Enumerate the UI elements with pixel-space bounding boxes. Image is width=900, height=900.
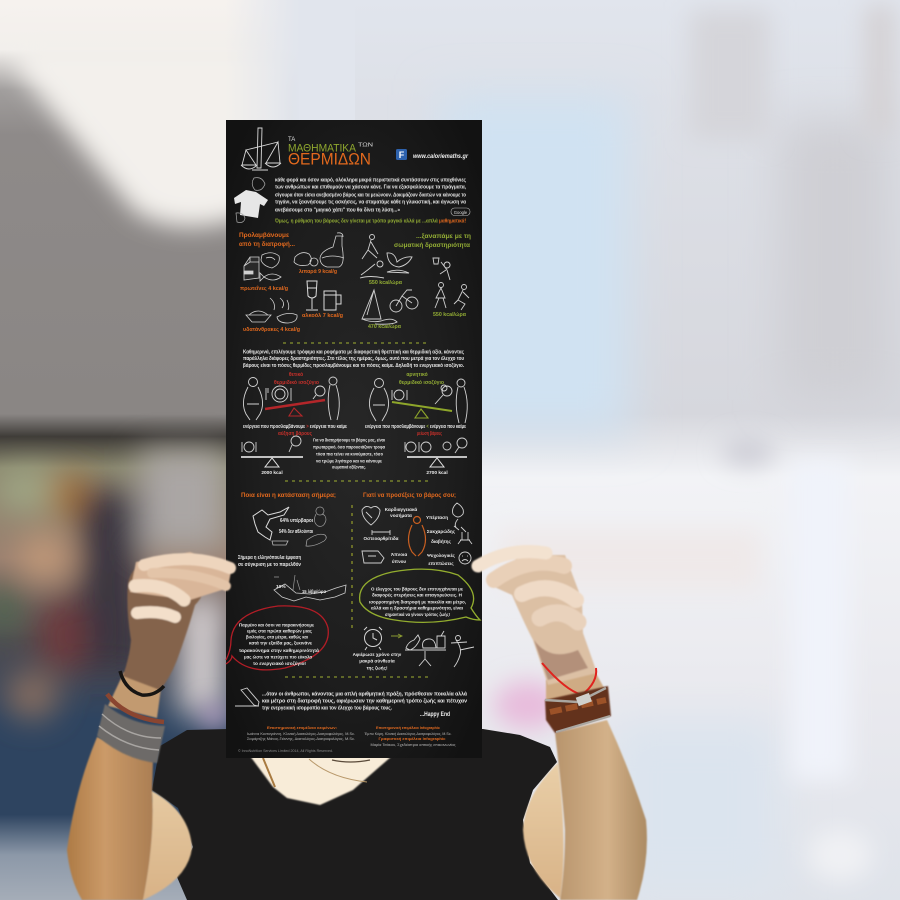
arrow: [391, 634, 402, 638]
panel: negative balance: θερμιδικό ισοζύγιο: [399, 380, 444, 386]
intro text: των ανθρώπων και επιθυμούν να χάσουν κάνε. Για να εξασφαλίσουμε τα πράγματα,: [275, 184, 467, 190]
credits: right: Έμπυ Κόρη, Κλινική Διαιτολόγος-Διατροφολόγος, M.Sc.: [364, 731, 452, 736]
panel: positive balance: θετικό: [289, 372, 303, 378]
website url: www.caloriemaths.gr: [413, 153, 468, 160]
labels: health risks: νοσήματα: [390, 513, 412, 518]
callout: green bubble: σημαντικά να γίνουν τρόπος ζωής!: [385, 612, 450, 618]
text: advice: σωματικά αξίζοντας.: [332, 464, 366, 470]
person: left hand: [123, 552, 232, 690]
credits: left: [247, 725, 355, 741]
callout: red bubble: [226, 606, 328, 670]
title: ΘΕΡΜΙΔΩΝ: [288, 150, 371, 168]
labels: health risks: Ψυχολογικές: [427, 553, 456, 559]
icons: health risks: [362, 503, 472, 564]
poster board: [226, 120, 482, 758]
panel: positive balance: θερμιδικό ισοζύγιο: [274, 380, 319, 386]
icon: balanced food and dancer: [405, 631, 474, 667]
text: negative equation: [365, 424, 466, 437]
labels: health risks: ύπνου: [392, 559, 406, 564]
map: Greece with stats: 64% υπέρβαροι: [280, 518, 314, 524]
map: Crete: 15 λίβρ/ώρα: [302, 589, 326, 595]
paragraph: energy balance: [243, 350, 464, 369]
icons: sports group 2: [362, 290, 418, 324]
button: close: [451, 208, 470, 216]
text: take time: Αφιέρωσε χρόνο στην: [353, 652, 402, 657]
heading: why watch weight: Γιατί να προσέξεις το βάρος σου;: [363, 492, 456, 499]
intro text: τηγάνι, να ξεκινήσουμε τις ασκήσεις, να σταματάμε κάθε η γλυκιστική, και άγνωση να: [275, 200, 467, 206]
icon: pencil: [235, 688, 259, 706]
text: advice: πρωταρχικό, όσα παρουσιάζουν τροφα: [313, 444, 385, 450]
person: shirt: [152, 729, 558, 900]
copyright: © InnoNutrition Services Limited 2014, All Rights Reserved.: [238, 749, 333, 753]
button: close: Google: [454, 210, 468, 215]
credits: left: Σαμάρτζης Μάνος-Γιάννης, Διαιτολόγος-Διατροφολόγος, M.Sc.: [247, 736, 355, 741]
balance: 2000 kcal: [241, 436, 303, 476]
text: eating habits: [238, 555, 301, 568]
icon: F logo: [396, 149, 407, 160]
credits: right: Επιστημονική επιμέλεια Infographic: [376, 725, 441, 730]
callout: red bubble: ταρακούνημα στην καθημερινότητά: [239, 648, 319, 653]
paragraph: energy balance: βάρους είναι το πόσες θερμίδες προσλαμβάνουμε και το πόσες καίμε. Δηλαδή το ενεργειακό ισοζύγιο.: [243, 363, 464, 369]
intro text: [275, 178, 467, 214]
text: positive equation: [243, 424, 348, 437]
callout: green bubble: διαφορές στερήσεις και απαγορεύσεις. Η: [372, 592, 462, 598]
balance: 2000 kcal: 2000 kcal: [261, 470, 283, 476]
heading: current situation: Ποια είναι η κατάσταση σήμερα;: [241, 492, 336, 499]
icons: protein foods: [244, 253, 281, 281]
labels: health risks: Υπέρταση: [426, 515, 448, 520]
panel: negative balance: [369, 372, 467, 423]
text: take time: [353, 652, 402, 672]
labels: health risks: Καρδιαγγειακά: [385, 507, 417, 512]
map: Crete: [274, 575, 346, 601]
credits: right: Μαρία Τσάκου, Σχεδιάστρια οπτικής επικοινωνίας: [370, 742, 456, 747]
heading: diet: Προλαμβάνουμε: [239, 231, 290, 239]
icon: t-shirt: [234, 178, 268, 222]
credits: right: Γραφιστική επιμέλεια Infographic: [378, 736, 446, 741]
label: activity 3: 550 kcal/ώρα: [433, 312, 467, 318]
happy end: ...Happy End: [420, 712, 450, 718]
icons: sports group 1: [360, 234, 412, 278]
heading: diet: από τη διατροφή...: [239, 241, 295, 248]
callout: green bubble: ισορροπημένη διατροφή με ποικιλία και μέτρο,: [369, 600, 466, 604]
credits: left: Επιστημονική επιμέλεια κειμένων:: [267, 725, 337, 730]
label: activity 1: 550 kcal/ώρα: [369, 280, 403, 286]
icon: orange body: [408, 516, 426, 556]
text: eating habits: σε σύγκριση με το παρελθόν: [238, 562, 301, 568]
balance: 2700 kcal: 2700 kcal: [426, 470, 448, 476]
text: take time: μακρά σύνθεσία: [359, 658, 395, 664]
person: right wristbands: [542, 663, 611, 733]
icons: fats: [294, 233, 344, 267]
title: [288, 137, 373, 168]
text: advice: τόσα πια τείνει να κινούμαστε, τόσο: [316, 452, 383, 456]
text: eating habits: Σήμερα η ελληνόπουλα έμφαση: [238, 555, 301, 561]
icon: F logo: F: [399, 150, 405, 160]
closing text: ...όταν οι άνθρωποι, κάνοντας μια απλή αριθμητική πράξη, πρόσθεσαν ποικιλία αλλά: [262, 692, 468, 698]
title: ΤΑ: [288, 137, 295, 143]
heading: diet: [239, 231, 295, 248]
paragraph: energy balance: Καθημερινά, επιλέγουμε τρόφιμα και ροφήματα με διαφορετική θρεπτική και θερμιδική αξία, κάνοντας: [243, 350, 464, 356]
map: Greece with stats: 54% δεν αθλούνται: [279, 529, 313, 535]
panel: negative balance: αρνητικό: [406, 372, 428, 378]
credits: right: [364, 725, 456, 747]
divider dashes 1: [283, 342, 426, 344]
labels: health risks: Άπνοια: [391, 552, 407, 557]
divider dashes 2: [285, 480, 428, 482]
text: advice: να τρώμε λιγότερο και να κάνουμε: [316, 458, 383, 464]
label: alcohol: αλκοόλ 7 kcal/g: [302, 313, 343, 319]
divider dashes vertical: [351, 505, 353, 632]
text: advice: [313, 438, 386, 470]
callout: red bubble: βιολογίας, στα μέτρα, καθώς και: [246, 634, 309, 640]
callout: red bubble: το ενεργειακό ισοζύγιο!: [253, 661, 307, 667]
text: positive equation: αύξηση βάρους: [278, 431, 312, 437]
closing text: και μέτρο στη διατροφή τους, αφιέρωσαν την καθημερινή τρόπο ζωής και πέτυχαν: [262, 698, 467, 704]
intro text: κάθε φορά και όσον καιρό, ολόκληρα μικρά περιστατικά συντάσσουν στις υποχθόνιες: [275, 178, 466, 184]
labels: health risks: [364, 507, 456, 567]
callout: green bubble: αλλά και η δραστήρια καθημερινότητα, είναι: [371, 606, 464, 610]
divider dashes 3: [285, 676, 428, 678]
label: fats: λιπαρά 9 kcal/g: [299, 269, 337, 275]
intro text: ανεβάσουμε στο "μαγικό χάπι" που θα δίνει τη λύση...»: [275, 208, 400, 214]
callout: red bubble: μας ώστε να πετύχετε πιο εύκολα: [244, 654, 312, 660]
icons: carbohydrates: [246, 298, 297, 323]
labels: health risks: διαβήτης: [431, 539, 451, 545]
person: right arm: [523, 668, 647, 900]
labels: health risks: Οστεοαρθρίτιδα: [364, 536, 399, 541]
icon: scale: [241, 128, 281, 170]
callout: green bubble: [360, 569, 480, 622]
labels: health risks: επιπτώσεις: [428, 561, 454, 567]
intro conclusion: Όμως, η ρύθμιση του βάρους δεν γίνεται με τρόπο μαγικό αλλά με ...απλά μαθηματικά!: [274, 218, 466, 224]
text: positive equation: ενέργεια που προσλαμβάνουμε > ενέργεια που καίμε: [243, 424, 348, 430]
person: left wristbands: [97, 671, 165, 763]
panel: positive balance: [243, 372, 339, 420]
closing text: [262, 692, 468, 712]
title: ΤΩΝ: [358, 142, 373, 148]
label: protein: πρωτεΐνες 4 kcal/g: [240, 286, 288, 292]
icon: clock: [364, 627, 382, 650]
labels: health risks: Σακχαρώδης: [427, 529, 456, 535]
title: ΜΑΘΗΜΑΤΙΚΑ: [288, 142, 357, 154]
map: Greece with stats: [253, 507, 326, 546]
heading: activity: [394, 233, 471, 249]
label: activity 2: 470 kcal/ώρα: [368, 324, 402, 330]
icons: sports group 3: [433, 258, 469, 310]
map: Crete: 10%: [276, 584, 286, 590]
heading: activity: ...ξαναπάμε με τη: [416, 233, 471, 240]
intro text: σίγουρα όταν είσαι ανεβασμένο βάρος και τα μειώνουν. Δοκιμάζουν διαιτών να κάνουμε το: [275, 192, 466, 198]
person: neck and necklace: [250, 756, 392, 805]
balance: 2700 kcal: [405, 438, 467, 476]
text: take time: της ζωής!: [367, 666, 388, 672]
callout: red bubble: κατά την εξαίδα μας, ξεκινάνε: [249, 640, 313, 646]
credits: left: Ιωάννα Κοντογιάννη, Κλινική Διαιτολόγος-Διατροφολόγος, M.Sc.: [247, 731, 355, 736]
paragraph: energy balance: παράλληλα διάφορες δραστηριότητες. Στο τέλος της ημέρας, όμως, αυτό που μετρά για τον έλεγχο του: [243, 356, 464, 362]
text: negative equation: ενέργεια που προσλαμβάνουμε < ενέργεια που καίμε: [365, 424, 466, 430]
callout: green bubble: Ο έλεγχος του βάρους δεν επιτυγχάνεται με: [371, 586, 464, 592]
closing text: την ενεργειακή ισορροπία και τον έλεγχο του βάρους τους.: [262, 706, 392, 712]
callout: red bubble: Παρμένο και όσοι να παρακινήσουμε: [239, 622, 315, 628]
icons: alcohol: [306, 281, 341, 310]
person: left arm: [67, 672, 192, 900]
label: carbohydrates: υδατάνθρακες 4 kcal/g: [243, 327, 300, 333]
callout: red bubble: εμάς στα πρώτα καθαρών μιας: [247, 628, 313, 634]
heading: activity: σωματική δραστηριότητα: [394, 242, 470, 249]
text: advice: Για να διατηρήσουμε το βάρος μας, είναι: [313, 438, 386, 444]
text: negative equation: μείωση βάρους: [417, 431, 442, 437]
person: right hand: [478, 552, 597, 685]
